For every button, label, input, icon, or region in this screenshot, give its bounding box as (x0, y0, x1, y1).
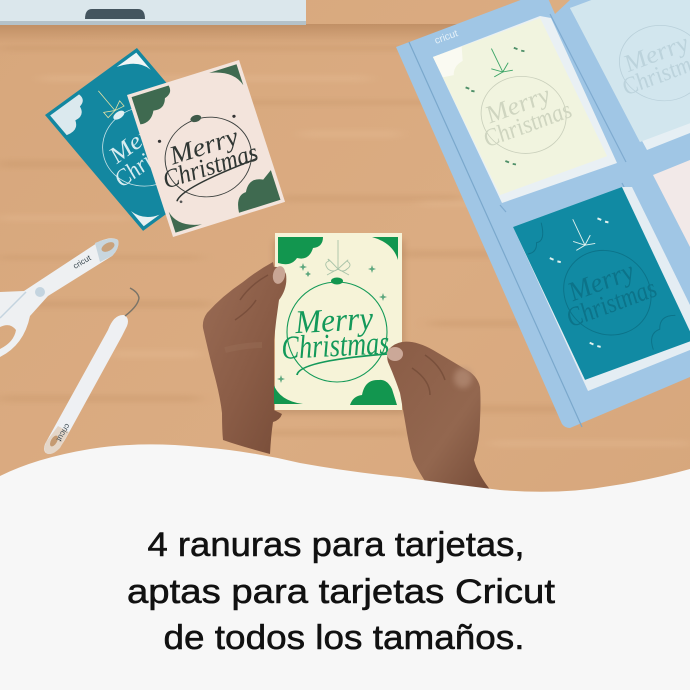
card text: Merry Christmas: Christmas (561, 273, 661, 333)
weeding tool (44, 288, 139, 454)
slot 3 (513, 187, 690, 391)
weeding tool brand: cricut (54, 422, 72, 444)
slot 4 (653, 160, 690, 247)
sparkles (277, 263, 387, 383)
card text: Merry Christmas: Christmas (478, 96, 576, 153)
main cream card with green foil (273, 233, 402, 410)
caption heading: de todos los tamaños. (164, 619, 524, 657)
mat brand: cricut (433, 28, 460, 47)
card text: Merry Christmas: Merry (479, 80, 556, 129)
card text: Merry Christmas (153, 118, 264, 203)
card shadow (273, 240, 405, 414)
right hand (387, 342, 492, 492)
caption heading (127, 526, 556, 657)
card text: Merry Christmas: Christmas (159, 138, 261, 194)
ornament bow (326, 240, 350, 275)
tray handle notch (85, 9, 145, 19)
craft scissors handle (0, 238, 118, 357)
caption heading: aptas para tarjetas Cricut (127, 573, 556, 611)
scissors brand: cricut (72, 253, 93, 271)
card text: Merry Christmas (551, 251, 661, 333)
card text: Merry Christmas: Christmas (109, 120, 198, 193)
card text: Merry Christmas: Merry (165, 122, 242, 170)
card text: Merry Christmas (468, 76, 576, 153)
card text: Merry Christmas: Merry (293, 301, 374, 341)
card text: Merry Christmas: Christmas (281, 325, 390, 367)
slot 1 (433, 16, 617, 203)
foil corners (273, 237, 398, 405)
teal card, left (45, 48, 235, 231)
card text: Merry Christmas (279, 300, 390, 367)
card text: Merry Christmas: Merry (562, 255, 640, 307)
machine tray at top (0, 0, 306, 25)
white wave panel (0, 444, 690, 690)
blue card mat (396, 0, 690, 428)
left hand (203, 262, 287, 454)
card text: Merry Christmas: Merry (103, 109, 174, 169)
caption heading: 4 ranuras para tarjetas, (148, 526, 524, 564)
ornament outline (287, 282, 387, 382)
slot 2 (570, 0, 690, 150)
pink card, left (127, 60, 285, 237)
